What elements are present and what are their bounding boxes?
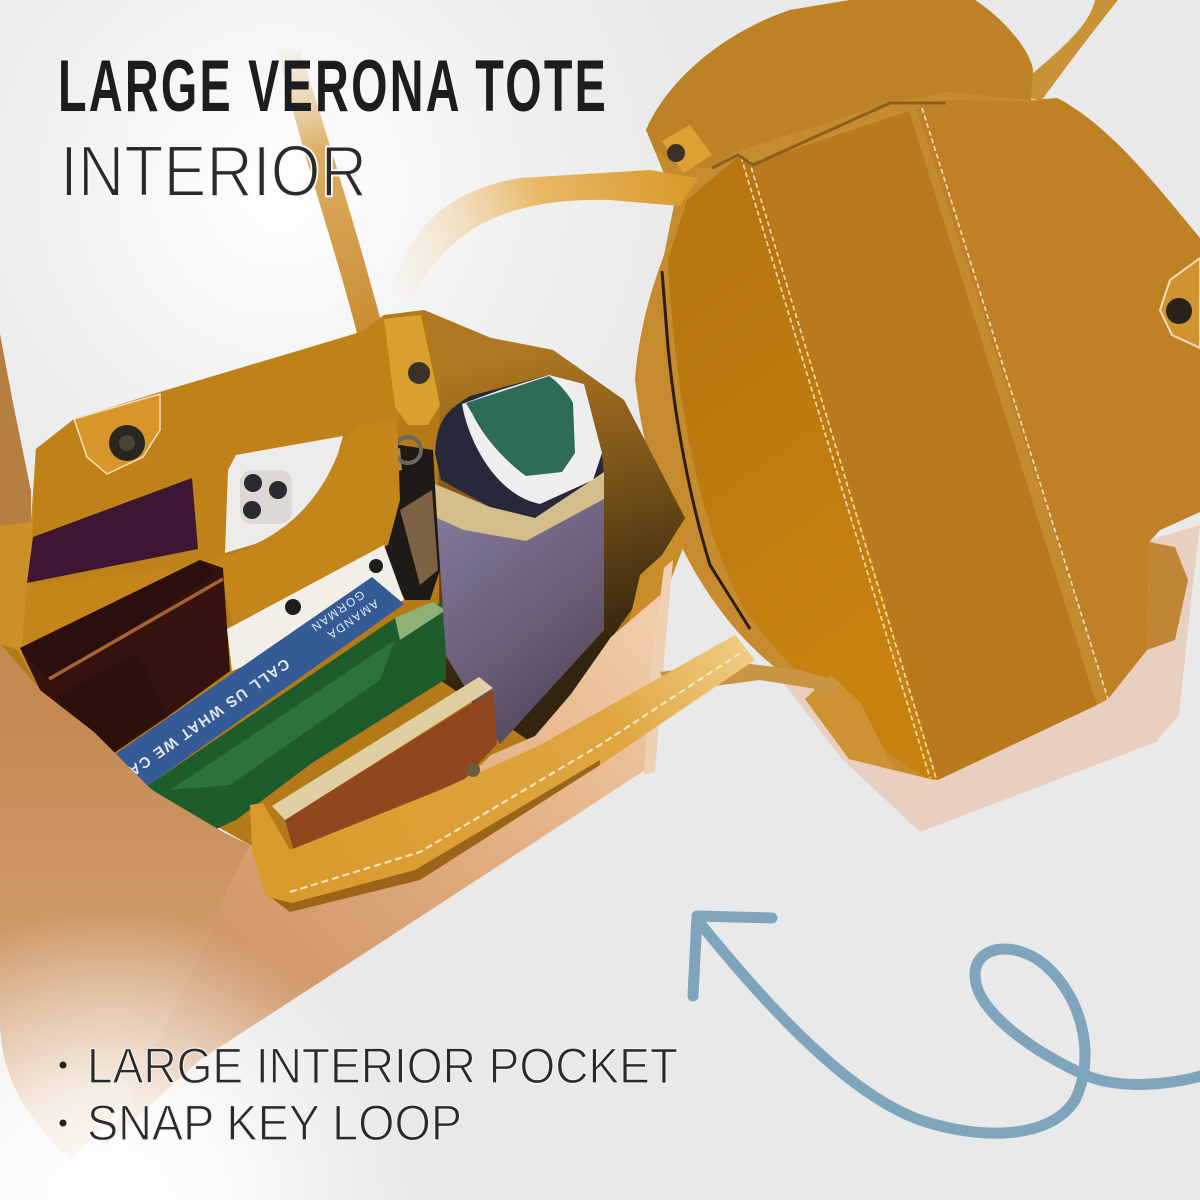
- left bag front panel: [0, 644, 250, 1160]
- keys and card: [361, 437, 440, 600]
- heading line 2: INTERIOR: [60, 132, 367, 212]
- left bag near handle strap: [250, 635, 755, 912]
- feature list: [60, 1038, 678, 1151]
- bullet 1: LARGE INTERIOR POCKET: [87, 1038, 678, 1094]
- purple wallet: [27, 478, 198, 583]
- left bag body: [0, 310, 840, 1200]
- snap key loop strap: [384, 315, 440, 425]
- right bag snap left: [662, 125, 712, 173]
- right bag left dark seam: [662, 271, 750, 629]
- left bag arched handle running to right bag: [392, 170, 698, 302]
- lower left fade: [0, 880, 420, 1200]
- left bag side edge: [644, 560, 673, 775]
- right bag: open tote seen from above: [635, 0, 1200, 832]
- right bag top pleat seam: [712, 103, 946, 168]
- green case: [147, 602, 446, 832]
- left bag back suede: [30, 315, 400, 590]
- right side rim fold: [625, 518, 690, 640]
- right bag interior base: [753, 111, 1097, 780]
- left bag upper left flap: [0, 449, 40, 690]
- right bag far handle: [1026, 0, 1118, 100]
- left handle strap: [0, 334, 31, 640]
- left bag right wall dark suede: [424, 310, 685, 745]
- interior pocket: [22, 419, 400, 644]
- left bag interior: [0, 310, 685, 860]
- right bag outer skin: [779, 525, 1200, 832]
- right bag right corner fold: [1147, 542, 1188, 650]
- insulated bottle: [435, 375, 604, 744]
- blue book: AMANDA: [324, 597, 381, 643]
- right bag upper suede flap: [646, 0, 1033, 168]
- right bag suede rim: [635, 0, 1200, 780]
- blue book: [114, 577, 404, 786]
- right bag stitching: [741, 108, 1108, 778]
- heading line 1: LARGE VERONA TOTE: [58, 45, 606, 126]
- polka dot pouch: [227, 545, 404, 671]
- curly arrow: [693, 916, 1200, 1133]
- blue book: GORMAN: [308, 588, 367, 635]
- bullet 2: SNAP KEY LOOP: [87, 1095, 462, 1151]
- smartphone in pocket: [225, 436, 343, 553]
- right bag right wall: [916, 98, 1200, 699]
- blue book: CALL US WHAT WE CA: [124, 655, 292, 780]
- handle continuation to right bag: [660, 662, 840, 692]
- brown wallet: [20, 560, 230, 755]
- left bag right front panel: [100, 595, 660, 1150]
- right bag snap right: [1160, 258, 1200, 348]
- right bag lower corner fold: [805, 675, 894, 770]
- right bag seam stitching band: [909, 108, 1108, 705]
- title: [58, 45, 606, 212]
- leather zip pouch: [272, 677, 497, 855]
- left bag far handle: [278, 50, 386, 345]
- left snap tab with rivet: [74, 394, 160, 474]
- right bag left wall: [668, 157, 938, 780]
